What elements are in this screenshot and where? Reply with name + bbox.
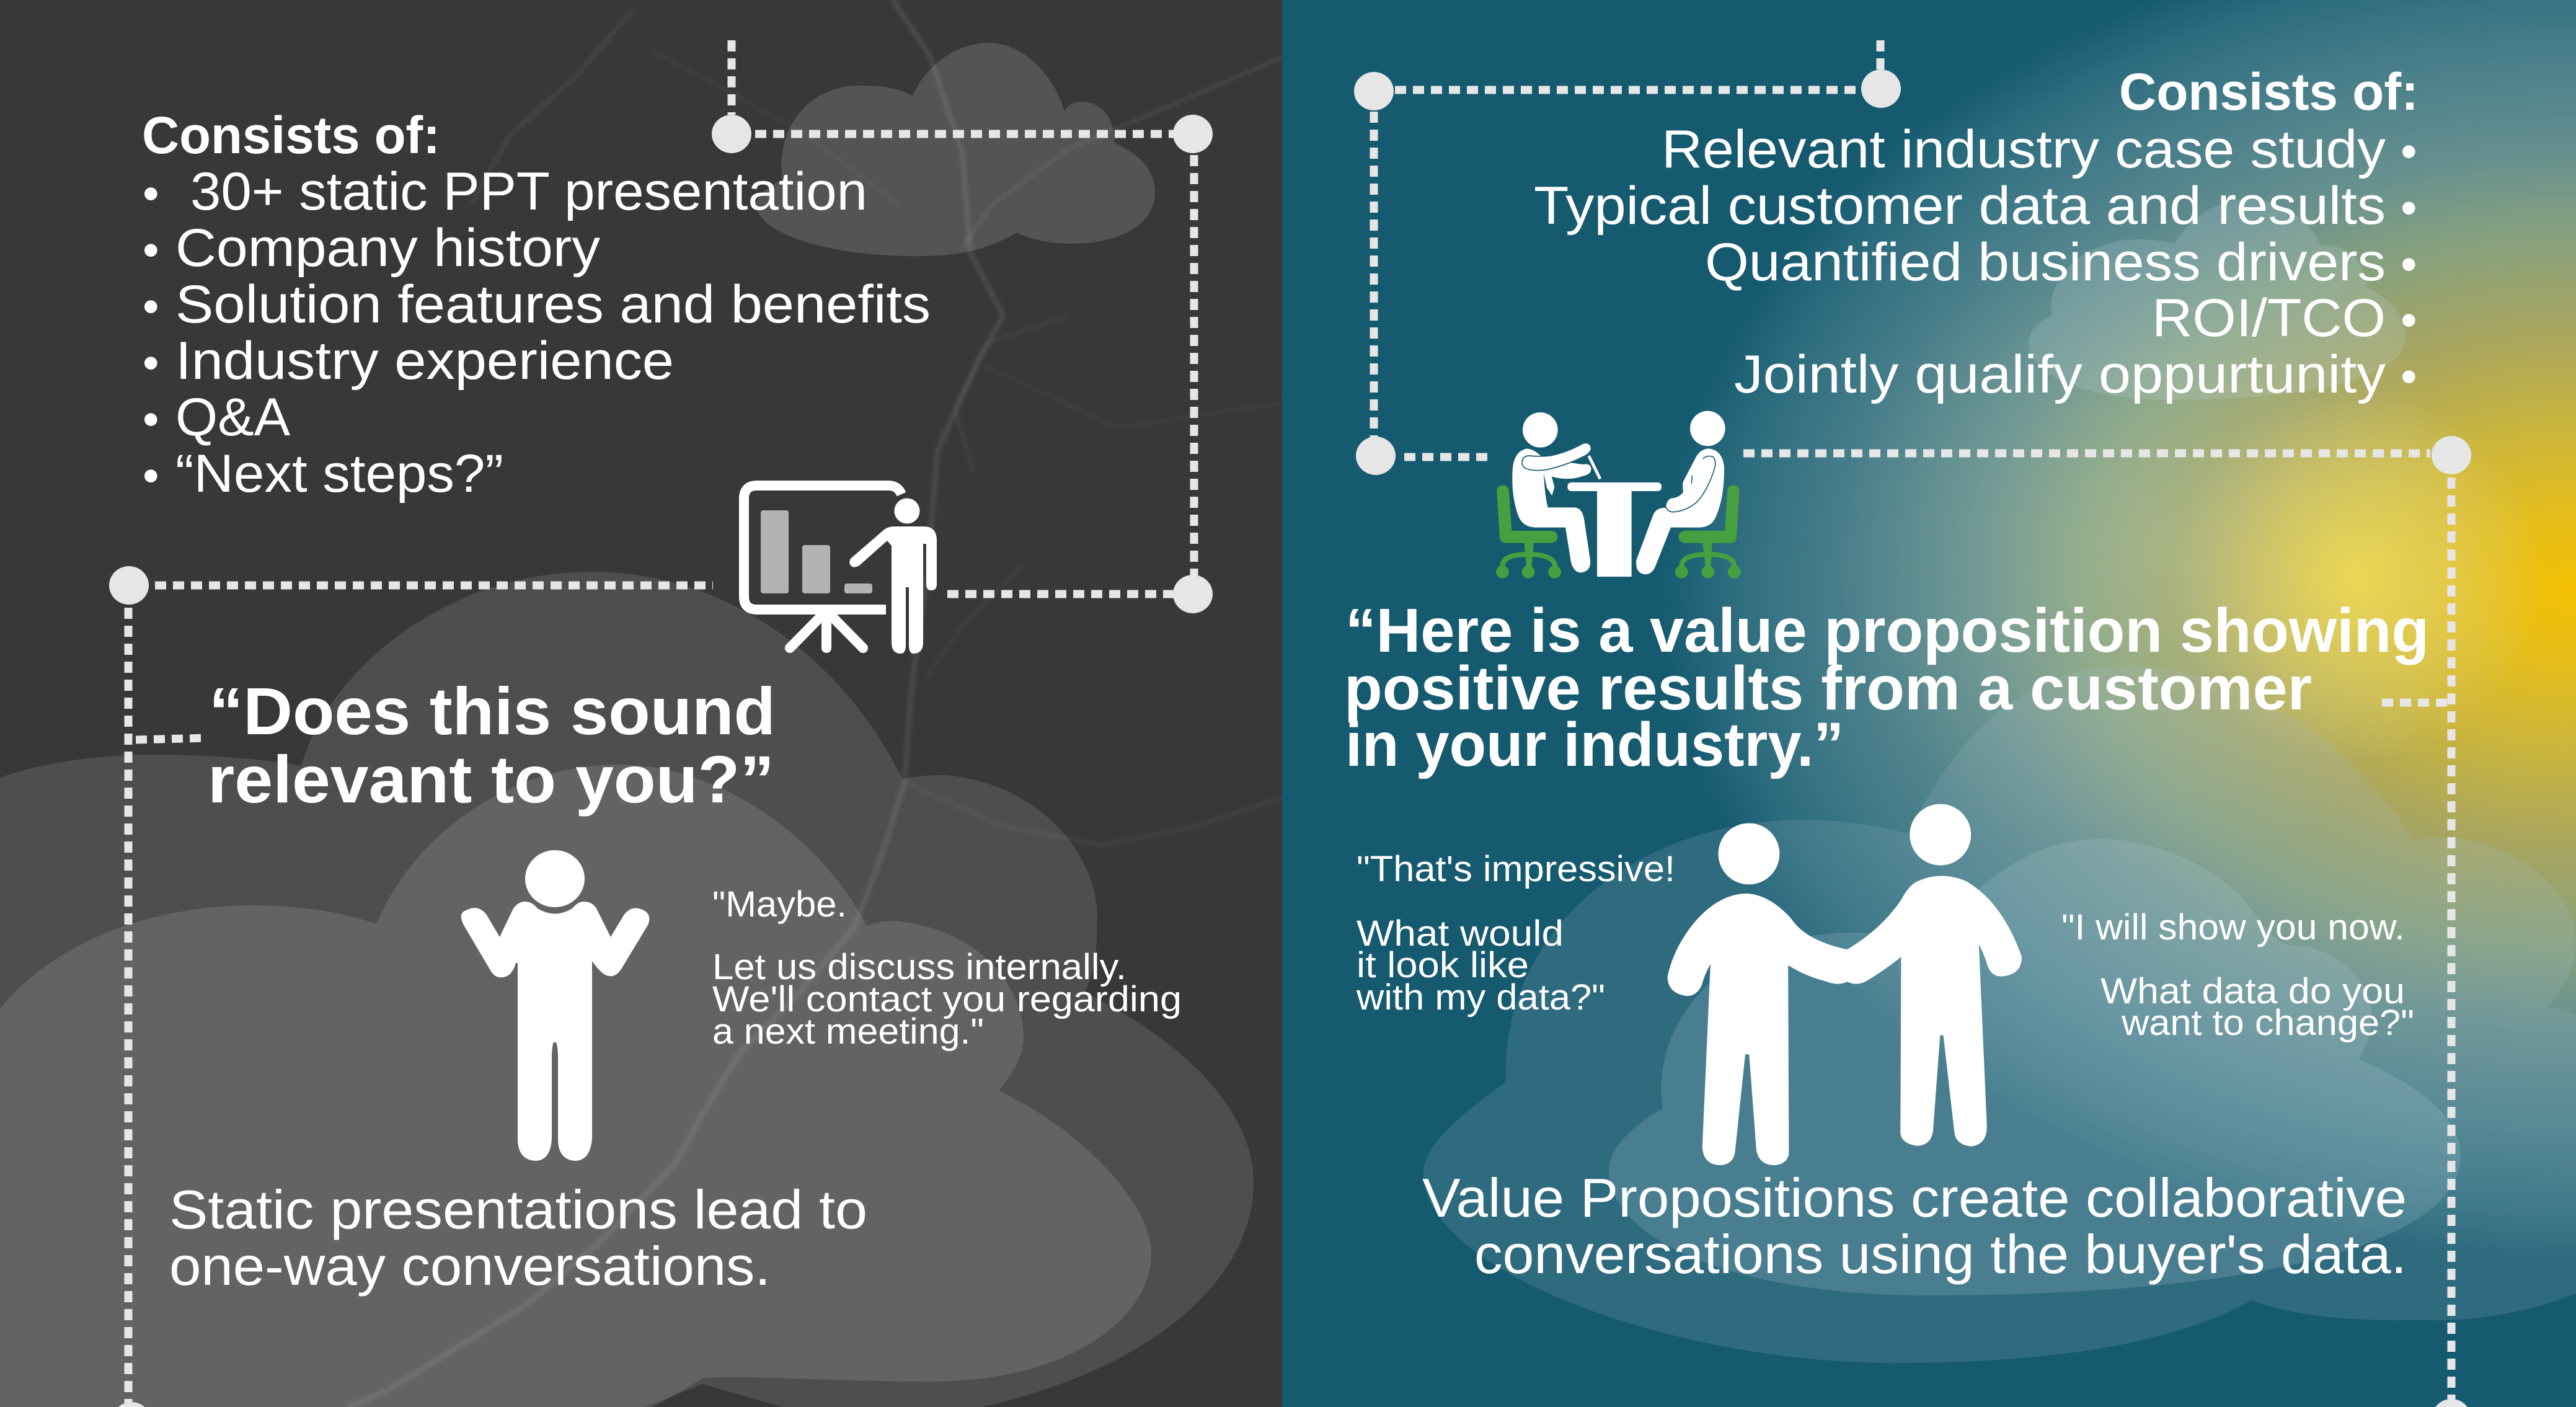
- text block: consists of list: •: [143, 393, 159, 446]
- conclusion: collaborative conversations: Value Propositions create collaborative: [1422, 1167, 2407, 1228]
- text block: consists of list: •: [143, 450, 159, 502]
- text block: consists of list: •: [2401, 238, 2417, 291]
- connector: right vertical: [2448, 477, 2455, 1407]
- cloud: large back layer: [1423, 665, 2576, 1363]
- quote: seller reply: [2061, 907, 2414, 1043]
- conclusion: one-way conversations: [169, 1179, 867, 1297]
- text block: consists of list: •: [143, 167, 159, 220]
- heading: does this sound relevant: relevant to you?”: [208, 742, 774, 817]
- panel background: dark: [0, 0, 1282, 1407]
- connector: to meeting icon: [1404, 453, 1491, 461]
- heading: value proposition quote: “Here is a value proposition showing: [1345, 596, 2429, 665]
- quote: buyer question: [1356, 849, 1675, 1018]
- right person: [1636, 411, 1725, 574]
- text block: consists of list: [142, 106, 931, 504]
- conclusion: collaborative conversations: conversations using the buyer's data.: [1474, 1223, 2407, 1285]
- quote: seller reply: What data do you: [2100, 971, 2405, 1011]
- left chair: [1496, 486, 1561, 579]
- connector: right vertical: [1190, 155, 1198, 577]
- node dots: [109, 115, 1213, 1407]
- heading: value proposition quote: in your industry.”: [1345, 710, 1844, 779]
- quote: seller reply: want to change?": [2121, 1003, 2414, 1043]
- text block: consists of list: •: [2401, 350, 2417, 403]
- haze around the glow: [1835, 223, 2480, 868]
- text block: consists of list: Industry experience: [175, 331, 674, 391]
- text block: consists of list: “Next steps?”: [175, 444, 503, 504]
- quote: buyer question: What would: [1357, 913, 1564, 954]
- quote: buyer question: it look like: [1357, 945, 1529, 985]
- text block: consists of list: •: [2401, 182, 2417, 234]
- text block: consists of list: Company history: [175, 218, 600, 278]
- text block: consists of list: Q&A: [175, 388, 291, 447]
- text block: consists of list: Relevant industry case study: [1662, 120, 2386, 179]
- cloud: large front layer: [1609, 839, 2461, 1295]
- heading: value proposition quote: [1344, 596, 2429, 779]
- cloud: small top: [2029, 199, 2406, 400]
- connector: heading stub: [136, 738, 206, 740]
- text block: consists of list: Consists of:: [142, 106, 440, 164]
- conclusion: collaborative conversations: [1422, 1167, 2407, 1285]
- quote: buyer question: with my data?": [1356, 977, 1605, 1018]
- node dots: [1354, 69, 2471, 1407]
- text block: consists of list: ROI/TCO: [2152, 288, 2386, 348]
- quote: buyer response: [712, 884, 1182, 1052]
- lightning texture: [347, 0, 1290, 1407]
- text block: consists of list: •: [2401, 125, 2417, 178]
- icon: two people shaking hands: [1668, 804, 2022, 1165]
- connector: from meeting icon: [1743, 449, 2430, 458]
- text block: consists of list: •: [143, 280, 159, 333]
- text block: consists of list: •: [143, 337, 159, 389]
- sun glow: [1282, 0, 2576, 1407]
- cloud: large front layer: [0, 765, 1151, 1407]
- icon: two people meeting at table: [1496, 411, 1741, 579]
- panel: value proposition (right): [1282, 0, 2576, 1407]
- connector: top horizontal: [1395, 86, 1859, 94]
- icon: presenter at chart board: [744, 486, 937, 654]
- connector: top horizontal: [755, 130, 1175, 138]
- text block: consists of list: Quantified business drivers: [1705, 233, 2386, 292]
- right chair: [1675, 486, 1741, 579]
- quote: buyer question: "That's impressive!: [1357, 849, 1675, 889]
- connector: left vertical: [1370, 112, 1378, 437]
- connector: top stub: [1876, 40, 1885, 69]
- text block: consists of list: [1534, 63, 2419, 404]
- quote: seller reply: "I will show you now.: [2061, 907, 2405, 948]
- panel: static presentation (left): [0, 0, 1290, 1407]
- heading: does this sound relevant: “Does this sound: [209, 673, 776, 748]
- conclusion: one-way conversations: one-way conversations.: [169, 1235, 771, 1297]
- heading: does this sound relevant: [208, 673, 776, 817]
- quote: buyer response: Let us discuss internally.: [712, 947, 1126, 987]
- quote: buyer response: "Maybe.: [712, 884, 847, 925]
- panel background: teal with sun glow: [1282, 0, 2576, 1407]
- conclusion: one-way conversations: Static presentations lead to: [169, 1179, 867, 1240]
- heading: value proposition quote: positive results from a customer: [1344, 654, 2312, 723]
- quote: buyer response: a next meeting.": [712, 1011, 984, 1052]
- text block: consists of list: •: [2401, 294, 2417, 347]
- cloud: small top: [756, 43, 1155, 256]
- connector: lower horizontal: [155, 582, 713, 589]
- icon: shrugging person: [461, 850, 649, 1161]
- cloud: large back layer: [0, 572, 1254, 1407]
- connector: heading stub: [2382, 698, 2449, 707]
- sun highlight: [2170, 391, 2542, 763]
- table: [1567, 482, 1662, 577]
- text block: consists of list: Typical customer data and results: [1534, 176, 2386, 236]
- text block: consists of list: •: [143, 224, 159, 277]
- left person: [1512, 412, 1600, 572]
- text block: consists of list: Jointly qualify oppurtunity: [1734, 345, 2386, 404]
- connector: left vertical: [124, 608, 133, 1407]
- text block: consists of list: Solution features and benefits: [175, 275, 931, 334]
- text block: consists of list: 30+ static PPT presentation: [190, 162, 867, 221]
- quote: buyer response: We'll contact you regarding: [712, 979, 1182, 1019]
- connector: to presenter: [947, 590, 1175, 598]
- connector: top stub: [728, 40, 735, 115]
- text block: consists of list: Consists of:: [2119, 63, 2419, 121]
